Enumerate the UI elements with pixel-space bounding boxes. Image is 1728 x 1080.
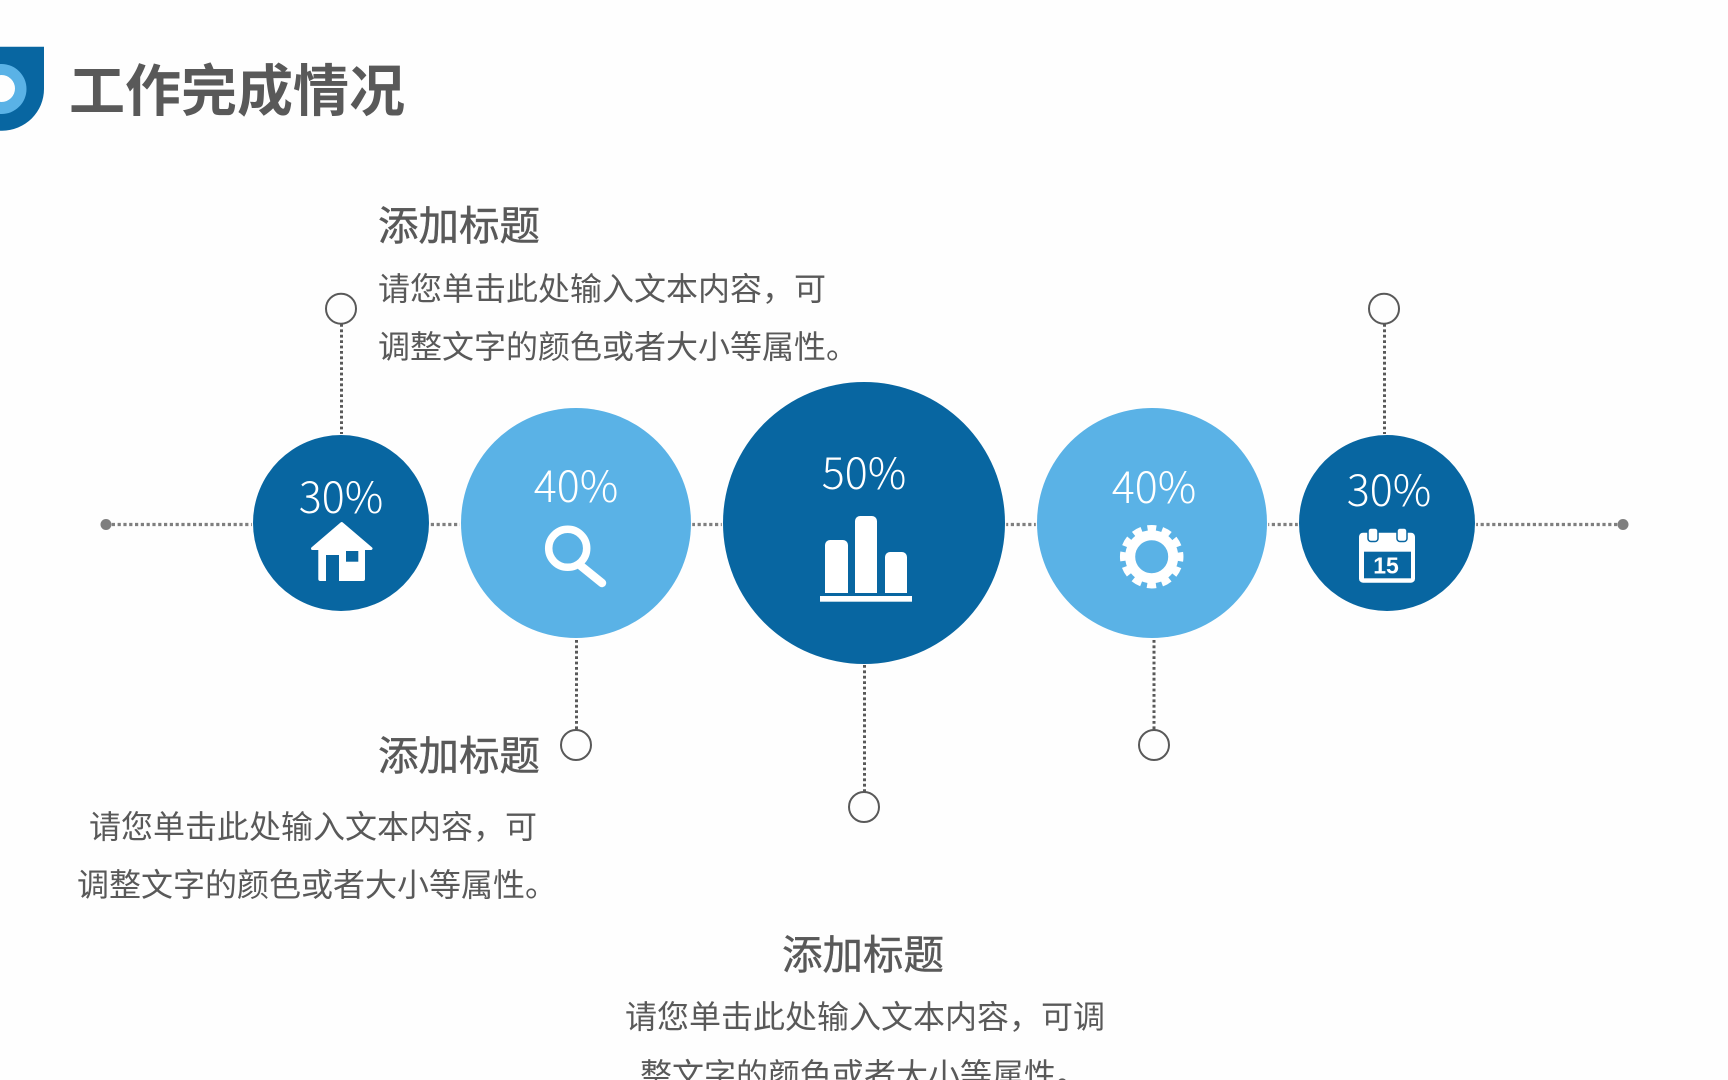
connector: node 4 <box>1139 640 1169 760</box>
icon: magnifier <box>549 529 602 583</box>
value 40%: 40% <box>1112 454 1196 516</box>
text block: bottom-center: 请您单击此处输入文本内容，可调 <box>625 992 1105 1038</box>
icon: house <box>312 524 371 581</box>
text block: top <box>378 264 858 368</box>
logo badge <box>0 47 44 131</box>
calendar date: 15 <box>1373 552 1399 578</box>
title: 工作完成情况 <box>69 47 405 128</box>
node 1: 30% home <box>253 435 429 611</box>
icon: calendar <box>1359 528 1415 583</box>
heading: bottom-left block: 添加标题 <box>378 723 540 782</box>
text block: bottom-center <box>625 992 1105 1080</box>
node 3: 50% chart <box>723 382 1005 664</box>
connector: node 5 <box>1369 294 1399 434</box>
icon: bar chart <box>820 516 912 602</box>
text block: top: 请您单击此处输入文本内容，可 <box>378 264 826 310</box>
value 50%: 50% <box>822 440 906 502</box>
node 5: 30% calendar <box>1299 435 1475 611</box>
icon: gear <box>1123 528 1180 585</box>
node 2: 40% search <box>461 408 691 638</box>
heading: bottom-center block: 添加标题 <box>782 922 944 981</box>
text block: top: 调整文字的颜色或者大小等属性。 <box>378 322 858 368</box>
text block: bottom-left <box>77 802 557 906</box>
value 30%: 30% <box>1347 457 1431 519</box>
connector: node 2 <box>561 640 591 760</box>
text block: bottom-left: 调整文字的颜色或者大小等属性。 <box>77 860 557 906</box>
connector: node 1 <box>326 294 356 434</box>
horizontal timeline <box>100 519 1628 530</box>
connector: node 3 <box>849 665 879 822</box>
node 4: 40% gear <box>1037 408 1267 638</box>
value 30%: 30% <box>299 464 383 526</box>
text block: bottom-left: 请您单击此处输入文本内容，可 <box>89 802 537 848</box>
heading: top block: 添加标题 <box>378 193 540 252</box>
value 40%: 40% <box>534 453 618 515</box>
